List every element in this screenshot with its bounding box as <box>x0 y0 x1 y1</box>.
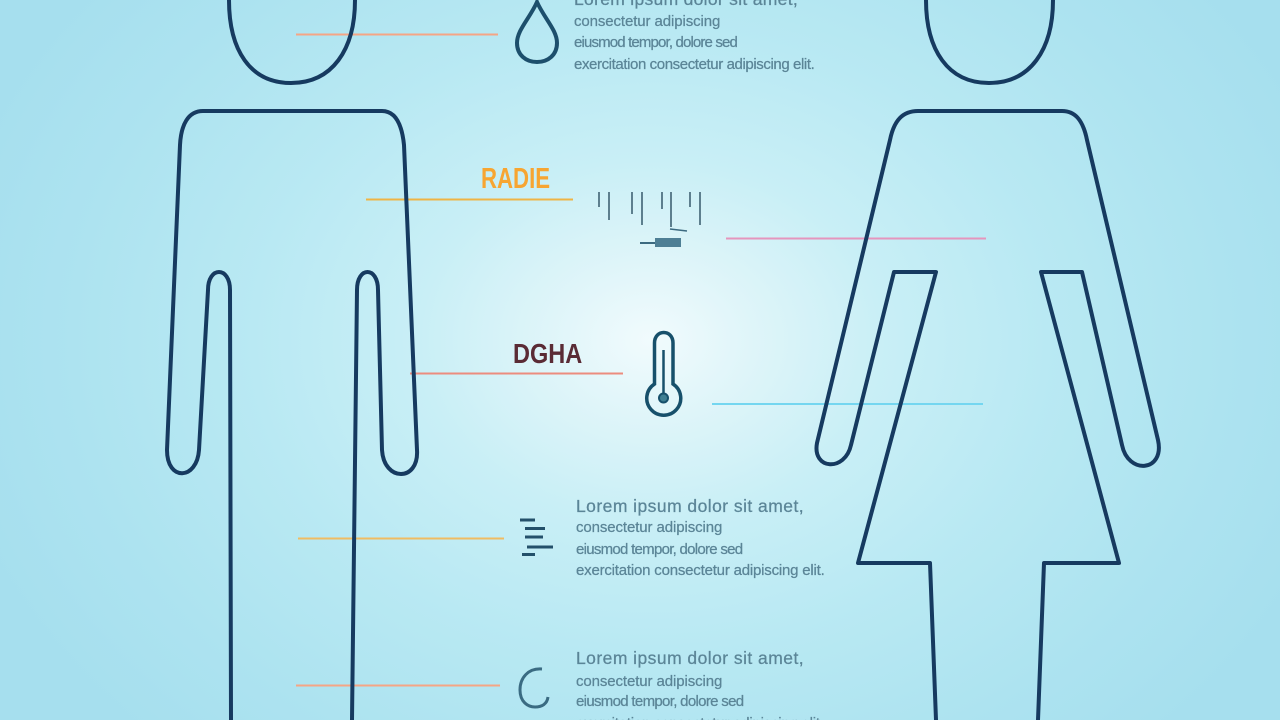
text block: bottom <box>576 648 824 720</box>
heading: orange label: RADIE <box>481 162 550 194</box>
icon: vertical bars with small device <box>599 192 700 247</box>
text block: top: exercitation consectetur adipiscing elit. <box>574 56 814 72</box>
male figure outline <box>167 0 417 720</box>
icon: water drop <box>517 2 557 62</box>
text block: middle: Lorem ipsum dolor sit amet, <box>576 496 804 516</box>
text block: bottom: consectetur adipiscing <box>576 672 722 690</box>
text block: bottom: Lorem ipsum dolor sit amet, <box>576 648 804 668</box>
female figure outline <box>816 0 1159 720</box>
connector lines <box>296 34 986 686</box>
text block: middle: eiusmod tempor, dolore sed <box>576 540 742 558</box>
icon: list lines <box>520 520 553 554</box>
text block: middle: consectetur adipiscing <box>576 519 722 536</box>
text block: middle <box>576 496 825 579</box>
text block: top: eiusmod tempor, dolore sed <box>574 34 737 51</box>
text block: middle: exercitation consectetur adipiscing elit. <box>576 562 825 579</box>
heading: dark label: DGHA <box>512 338 582 368</box>
text block: top <box>574 0 814 72</box>
text block: top: consectetur adipiscing <box>574 12 720 30</box>
icon: thermometer <box>647 332 681 415</box>
text block: bottom: eiusmod tempor, dolore sed <box>576 693 743 710</box>
icon: open circle <box>520 669 548 707</box>
